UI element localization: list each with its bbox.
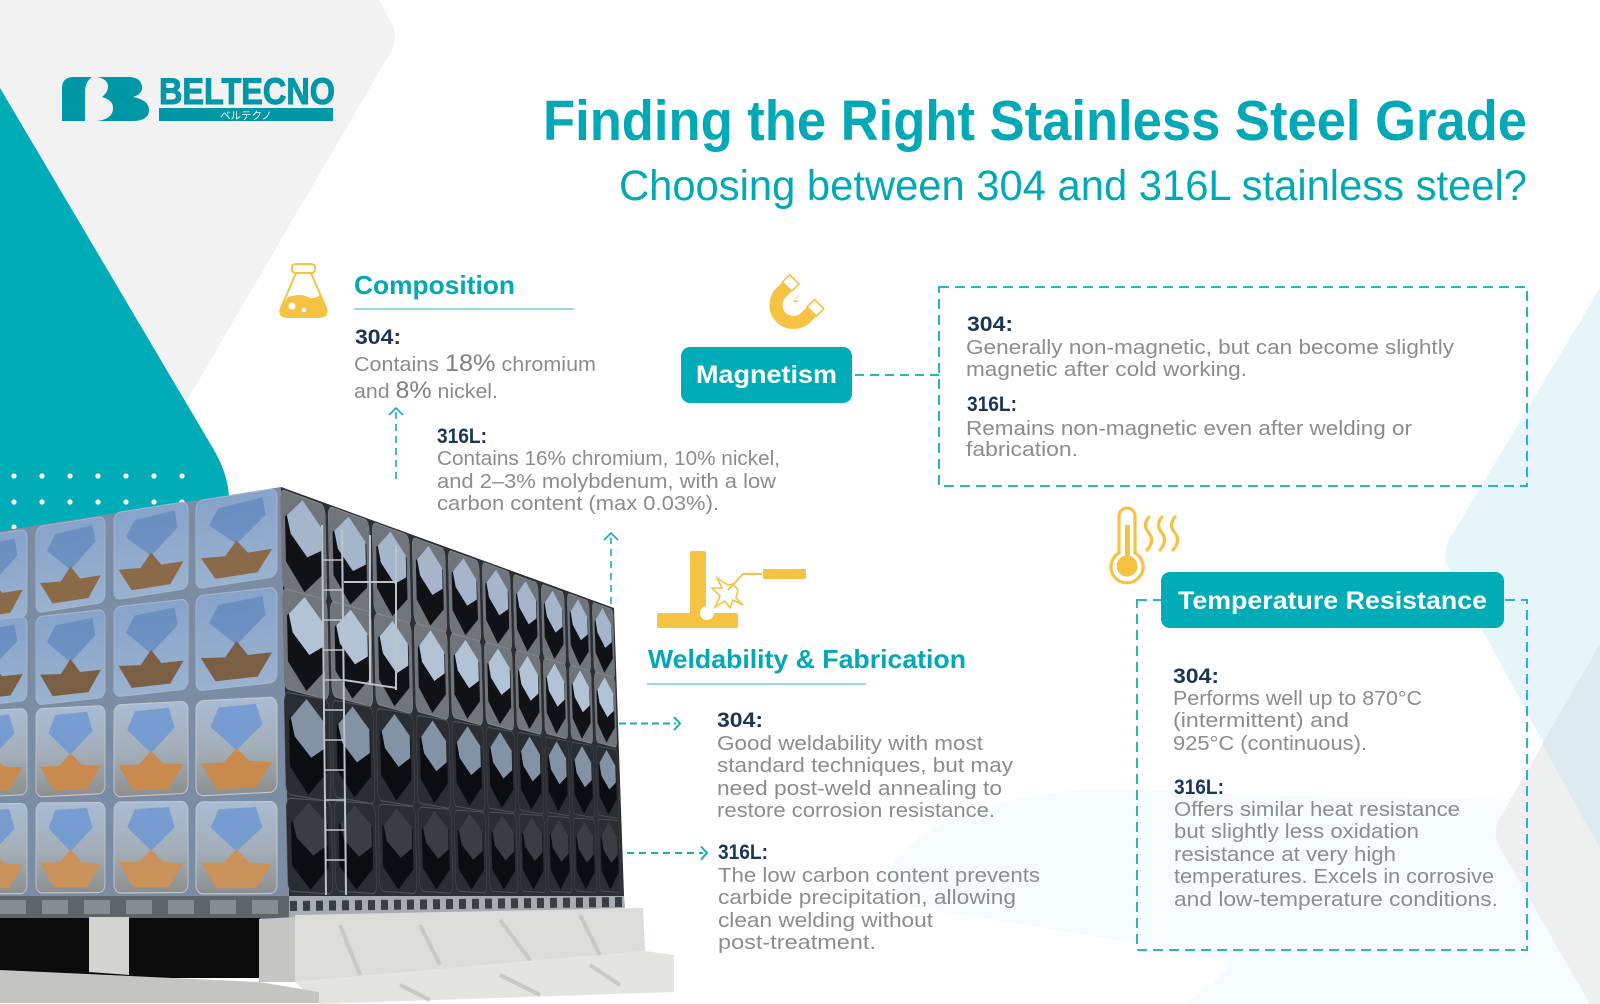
text: temperature 316L: 316L: [1174,776,1224,799]
text: composition 304: Contains 18% chromium [354,350,596,377]
text: composition 304: 304: [355,326,401,349]
text: composition 316L [437,425,780,515]
text: temperature 316L: temperatures. Excels in corrosive [1174,865,1494,888]
photo: stainless steel water tank [0,487,674,1004]
background: teal triangle [0,88,229,600]
text: magnetism 304 and 316L [966,313,1455,461]
text: temperature 316L [1174,776,1498,911]
text: temperature 304: (intermittent) and [1173,709,1349,732]
panel: composition [279,264,780,604]
text: temperature 316L: Offers similar heat resistance [1174,798,1460,821]
heading: weldability: Weldability & Fabrication [648,644,966,674]
text: weldability 316L: 316L: [718,841,768,864]
arrow: to weldability 316L [627,846,707,860]
background: pale blob bottom right [891,789,1600,1004]
text: temperature 304 [1173,665,1422,755]
panel: weldability [619,551,1040,954]
text: weldability 304: Good weldability with most [717,732,983,755]
text: magnetism 304 and 316L: 316L: [967,393,1017,416]
button: magnetism: Magnetism [696,361,837,389]
background: overlap tint right [1542,644,1600,848]
background: pale teal diamond right [1445,288,1600,848]
logo: Beltecno: BELTECNO [159,71,335,112]
background: white dots pattern [11,473,185,530]
title: Finding the Right Stainless Steel Grade [543,89,1527,153]
button: magnetism [681,347,852,403]
arrow: up to 304 [389,408,403,479]
text: composition 316L: Contains 16% chromium, 10% nickel, [437,447,780,470]
text: composition 316L: and 2–3% molybdenum, with a low [437,470,776,493]
tank front face panels [0,488,277,894]
text: composition 316L: 316L: [437,425,487,448]
tank base rail [0,896,625,919]
box: magnetism details [939,287,1527,486]
logo: Beltecno [62,71,335,122]
text: weldability 316L: clean welding without [718,909,933,932]
text: temperature 304: 925°C (continuous). [1173,732,1367,755]
text: magnetism 304 and 316L: Generally non-magnetic, but can become slightly [966,336,1455,359]
text: weldability 304: 304: [717,709,763,732]
icon: thermometer [1111,508,1178,583]
text: composition 304 [354,326,596,404]
text: composition 316L: carbon content (max 0.03%). [437,492,719,515]
text: magnetism 304 and 316L: fabrication. [966,438,1078,461]
connector: magnetism to box [855,374,939,376]
text: weldability 304: standard techniques, but may [717,754,1014,777]
icon: magnet [776,275,824,323]
text: weldability 316L: post-treatment. [718,931,876,954]
arrow: to weldability 304 [619,717,680,730]
arrow: up to composition [604,533,618,604]
icon: flask [279,264,327,317]
subtitle: Choosing between 304 and 316L stainless steel? [619,162,1527,210]
text: temperature 316L: but slightly less oxidation [1174,820,1419,843]
text: weldability 316L: carbide precipitation, allowing [718,886,1016,909]
heading: composition: Composition [354,270,515,300]
text: temperature 304: Performs well up to 870°C [1173,687,1422,710]
panel: magnetism [681,275,1527,486]
background: grey rounded triangle [0,0,395,420]
text: weldability 316L [718,841,1040,954]
tank ladder and cage [322,525,397,895]
text: weldability 304: restore corrosion resistance. [717,799,995,822]
text: composition 304: and 8% nickel. [354,377,498,404]
text: temperature 316L: resistance at very high [1174,843,1396,866]
text: weldability 316L: The low carbon content prevents [718,864,1040,887]
button: temperature resistance: Temperature Resistance [1178,587,1487,615]
logo: Beltecno: ベルテクノ [220,110,272,122]
text: magnetism 304 and 316L: Remains non-magnetic even after welding or [966,417,1412,440]
box: temperature details [1137,600,1527,950]
concrete foundation [0,908,674,1004]
text: temperature 316L: and low-temperature conditions. [1174,888,1498,911]
button: temperature resistance [1161,572,1504,628]
text: weldability 304 [717,709,1014,822]
text: magnetism 304 and 316L: magnetic after cold working. [966,358,1247,381]
text: weldability 304: need post-weld annealing to [717,777,1002,800]
tank side face panels [280,489,621,894]
text: temperature 304: 304: [1173,665,1219,688]
text: magnetism 304 and 316L: 304: [967,313,1013,336]
background: grey diamond right [1496,644,1600,1004]
icon: welding [657,551,806,628]
panel: temperature resistance [1111,508,1527,950]
